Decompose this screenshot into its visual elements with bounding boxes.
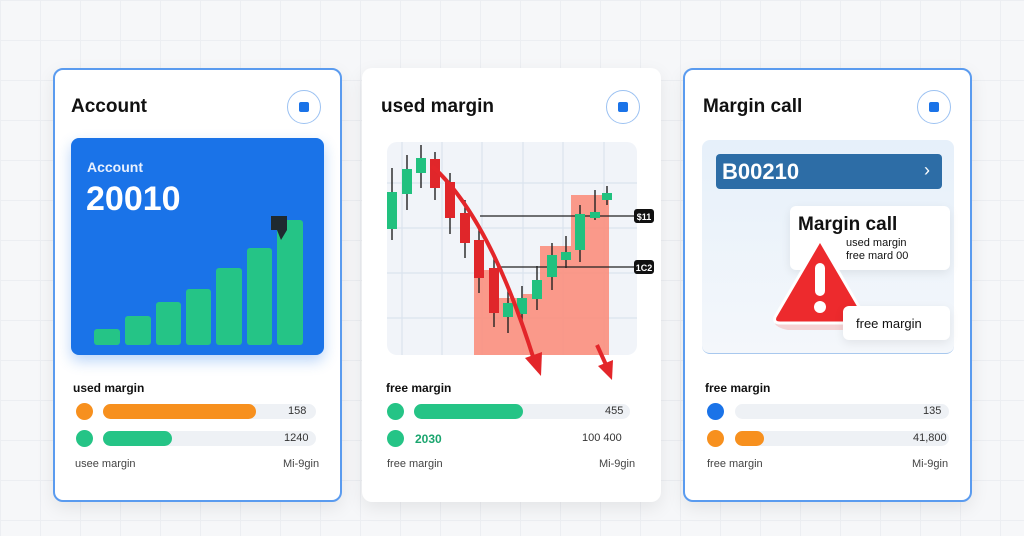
box: free margin — [843, 306, 950, 340]
text: balance: 20010 — [86, 180, 181, 218]
icon: used margin — [606, 90, 640, 124]
label: used margin: used margin — [73, 381, 144, 395]
icon: warning — [773, 243, 860, 330]
title: account: Account — [71, 96, 147, 117]
icon: account — [287, 90, 321, 124]
card: margin call — [683, 68, 972, 502]
text: Mi-9gin — [599, 458, 635, 470]
bar chart — [94, 216, 303, 345]
chart: candlesticks: 1C2 — [636, 263, 652, 273]
chart: candlesticks — [387, 142, 654, 380]
footer text: free margin — [707, 458, 763, 470]
account bar — [716, 154, 942, 189]
panel: margin call alert — [702, 140, 954, 354]
row: green text: 2030 — [415, 432, 442, 446]
text: Mi-9gin — [912, 458, 948, 470]
row: orange: 41,800 — [913, 432, 947, 444]
row: green bar: 1240 — [284, 432, 308, 444]
card: account — [53, 68, 342, 502]
popup: margin call: used margin — [846, 237, 907, 249]
popup: margin call: Margin call — [798, 214, 897, 235]
label: free margin: free margin — [705, 381, 770, 395]
row: green bar — [76, 430, 316, 447]
row: blue: 135 — [923, 405, 941, 417]
account bar: › — [924, 160, 930, 180]
chart: candlesticks: $11 — [637, 212, 651, 222]
title: used margin: used margin — [381, 96, 494, 117]
text: Mi-9gin — [283, 458, 319, 470]
box: free margin: free margin — [856, 316, 922, 331]
card: used margin — [362, 68, 661, 502]
footer text: usee margin — [75, 458, 136, 470]
row: green text — [387, 430, 622, 447]
row: blue — [707, 403, 949, 420]
row: orange bar — [76, 403, 316, 420]
row: orange — [707, 430, 949, 447]
row: green bar: 455 — [605, 405, 623, 417]
row: green bar — [387, 403, 630, 420]
label: free margin: free margin — [386, 381, 451, 395]
panel: account balance chart — [71, 138, 324, 355]
popup: margin call — [790, 206, 950, 270]
title: margin call: Margin call — [703, 96, 802, 117]
row: orange bar: 158 — [288, 405, 306, 417]
footer text: free margin — [387, 458, 443, 470]
popup: margin call: free mard 00 — [846, 250, 908, 262]
text: account label: Account — [87, 159, 143, 175]
icon: margin call — [917, 90, 951, 124]
account bar: B00210 — [722, 159, 799, 184]
row: green text: 100 400 — [582, 432, 622, 444]
